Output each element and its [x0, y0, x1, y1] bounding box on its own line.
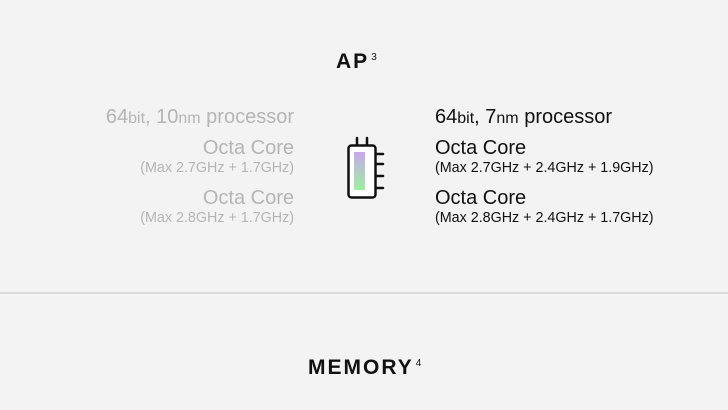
right column: new processor specs: 64bit, 7nm processor [435, 106, 612, 128]
left column: old processor specs: 64bit, 10nm processor [106, 106, 294, 128]
left column: old processor specs: (Max 2.8GHz + 1.7GHz) [140, 210, 294, 226]
title: AP: AP3 [336, 50, 379, 73]
right column: new processor specs [435, 106, 654, 226]
right column: new processor specs: Octa Core [435, 137, 526, 159]
right column: new processor specs: Octa Core [435, 187, 526, 209]
right column: new processor specs: (Max 2.7GHz + 2.4GHz + 1.9GHz) [435, 160, 654, 176]
left column: old processor specs: Octa Core [203, 187, 294, 209]
left column: old processor specs [106, 106, 294, 226]
right column: new processor specs: (Max 2.8GHz + 2.4GHz + 1.7GHz) [435, 210, 654, 226]
left column: old processor specs: Octa Core [203, 137, 294, 159]
left column: old processor specs: (Max 2.7GHz + 1.7GHz) [140, 160, 294, 176]
title: MEMORY: MEMORY4 [308, 356, 423, 379]
icon: chip [347, 136, 384, 199]
